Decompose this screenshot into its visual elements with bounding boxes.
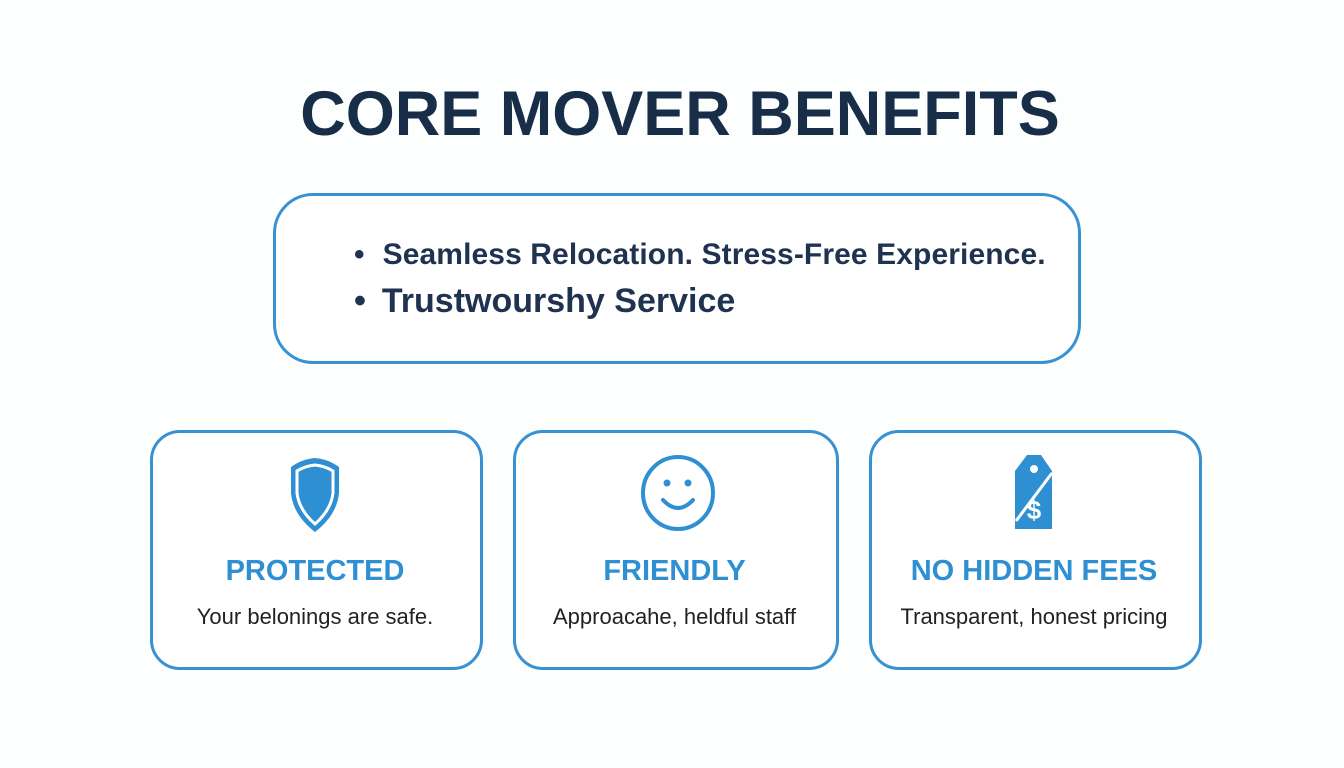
- bullet 1: • Seamless Relocation. Stress-Free Experience.: [354, 238, 1046, 271]
- heading: PROTECTED: [226, 555, 404, 587]
- icon: price tag: [1015, 455, 1052, 529]
- heading: NO HIDDEN FEES: [911, 555, 1157, 587]
- icon: smiley: [641, 455, 715, 531]
- title: CORE MOVER BENEFITS: [300, 79, 1060, 149]
- panel: summary box: [273, 193, 1081, 364]
- heading: FRIENDLY: [603, 555, 746, 587]
- icon: price tag: $: [1027, 495, 1042, 525]
- icon: shield: [291, 458, 339, 532]
- bullet 2: • Trustwourshy Service: [354, 282, 735, 320]
- text: Your belonings are safe.: [197, 604, 433, 629]
- panel: protected: [150, 430, 483, 670]
- panel: friendly: [513, 430, 839, 670]
- panel: no hidden fees: [869, 430, 1202, 670]
- text: Approacahe, heldful staff: [553, 604, 796, 629]
- text: Transparent, honest pricing: [900, 604, 1168, 629]
